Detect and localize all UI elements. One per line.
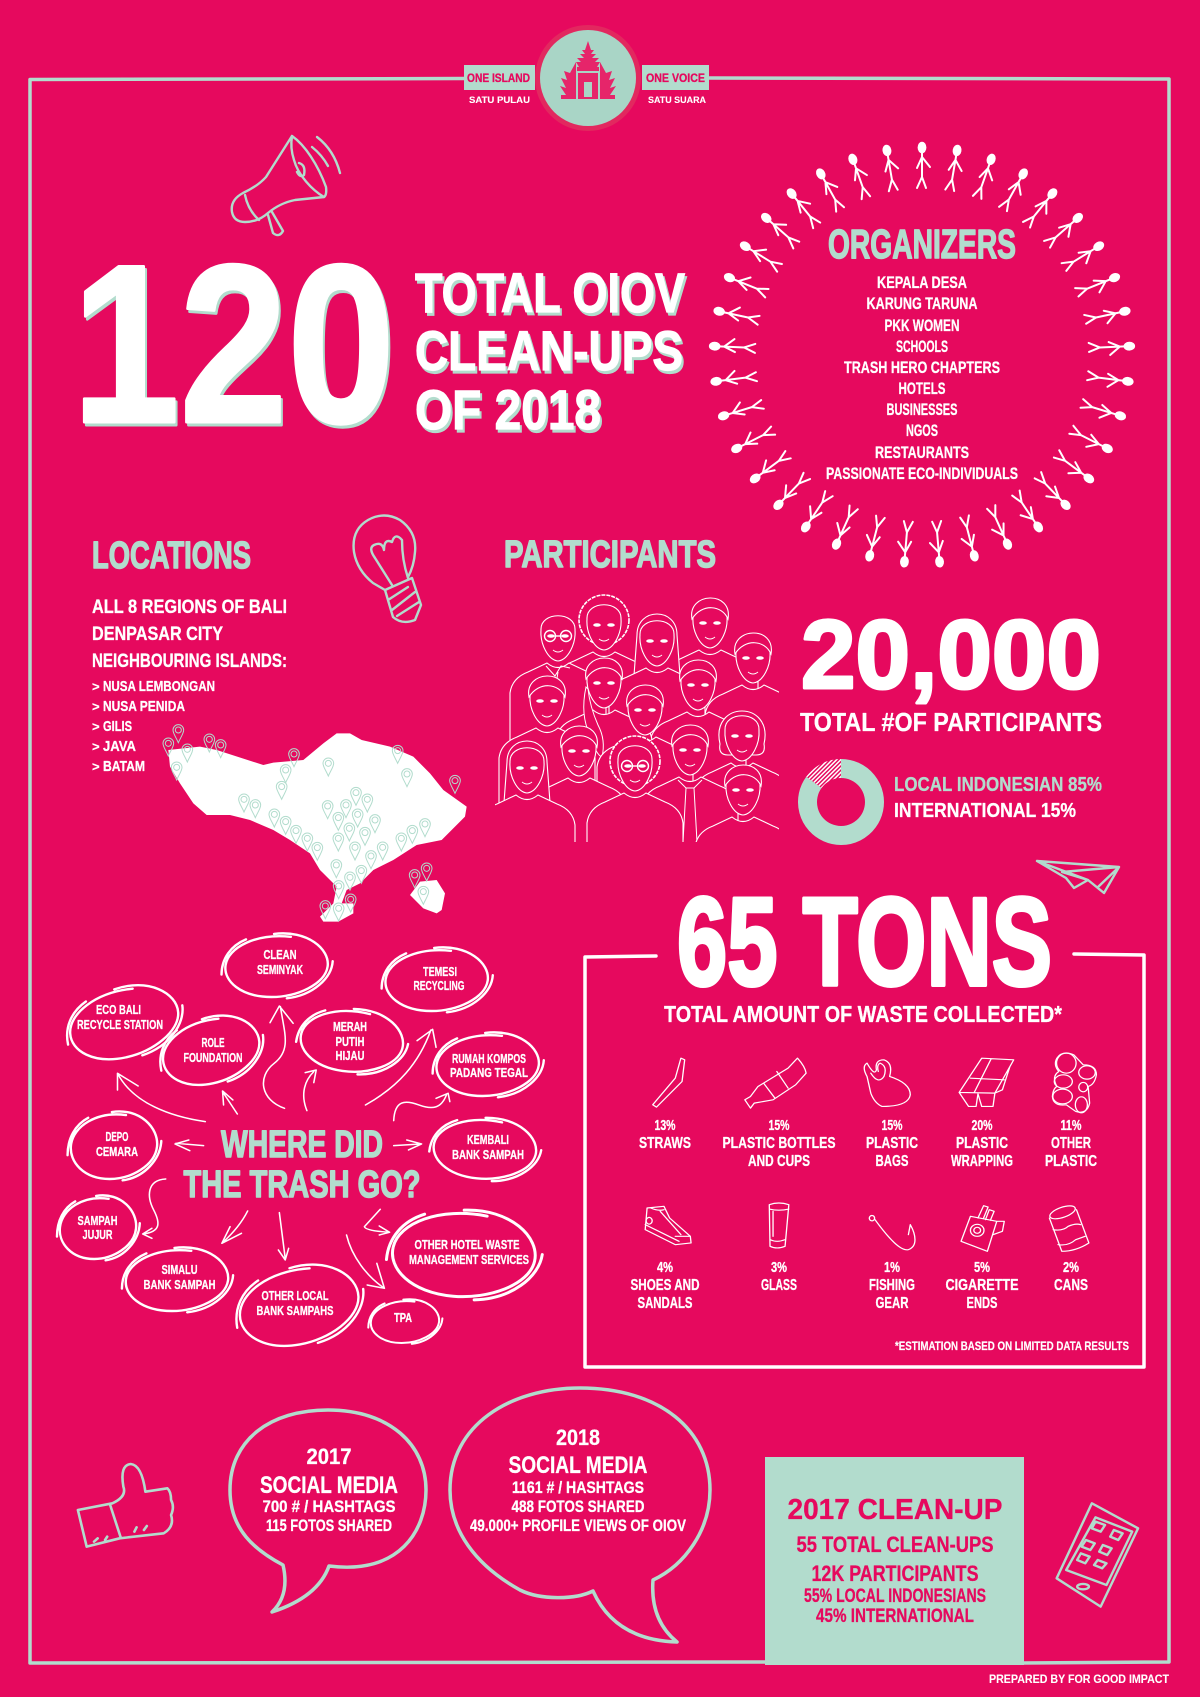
- item: fishing gear: 1%: [884, 1259, 900, 1276]
- panel: 2017 clean-up: 55% LOCAL INDONESIANS: [804, 1586, 986, 1607]
- donut legend: LOCAL INDONESIAN 85%: [894, 774, 1102, 796]
- destination: Simalu Bank Sampah: [122, 1247, 233, 1312]
- subheading: total amount of waste: TOTAL AMOUNT OF WASTE COLLECTED*: [664, 1001, 1062, 1027]
- destination: Temesi Recycling: TEMESI: [423, 964, 457, 979]
- panel: organizers ring: [709, 142, 1135, 568]
- item: plastic bottles and cups: 15%: [768, 1117, 790, 1134]
- destination: Merah Putih Hijau: PUTIH: [336, 1034, 364, 1049]
- destination: Other Local Bank Sampahs: [228, 1256, 371, 1356]
- locations list: [92, 597, 287, 775]
- icon: light bulb: [354, 516, 421, 622]
- destination: Eco Bali Recycle Station: RECYCLE STATION: [77, 1017, 163, 1032]
- speech bubble: 2018 social media: 488 FOTOS SHARED: [512, 1497, 644, 1516]
- item: straws: [639, 1058, 691, 1152]
- speech bubble: 2018 social media: 2018: [556, 1425, 600, 1450]
- headline: 120 total clean-ups: TOTAL OIOV: [417, 264, 687, 327]
- organizers list: RESTAURANTS: [875, 443, 969, 462]
- item: other plastic: PLASTIC: [1045, 1153, 1097, 1170]
- item: plastic wrapping: PLASTIC: [956, 1135, 1008, 1152]
- headline: 65 tons: 65 TONS: [677, 873, 1052, 1012]
- donut chart: local vs international: [807, 768, 874, 835]
- item: other plastic: OTHER: [1051, 1135, 1091, 1152]
- destination: Merah Putih Hijau: MERAH: [333, 1019, 367, 1034]
- heading: locations: LOCATIONS: [92, 535, 251, 577]
- heading: where did the trash go: WHERE DID: [221, 1124, 383, 1166]
- icon: megaphone: [232, 136, 340, 235]
- destination: Simalu Bank Sampah: SIMALU: [162, 1262, 198, 1277]
- item: cans: CANS: [1054, 1277, 1088, 1294]
- headline: 120 total clean-ups: [72, 217, 687, 473]
- destination: Clean Seminyak: [222, 933, 333, 998]
- item: plastic wrapping: WRAPPING: [951, 1153, 1013, 1170]
- headline: 120 total clean-ups: 120: [74, 220, 397, 473]
- item: fishing gear: [869, 1216, 915, 1312]
- destination: Rumah Kompos Padang Tegal: PADANG TEGAL: [450, 1065, 528, 1080]
- organizers list: BUSINESSES: [886, 400, 958, 419]
- item: plastic bags: [864, 1060, 918, 1170]
- organizers list: SCHOOLS: [896, 337, 948, 356]
- stat: 20,000 participants: TOTAL #OF PARTICIPANTS: [800, 707, 1102, 737]
- locations list: ALL 8 REGIONS OF BALI: [92, 597, 287, 618]
- destination: Eco Bali Recycle Station: ECO BALI: [96, 1002, 141, 1017]
- panel: 2017 clean-up: 45% INTERNATIONAL: [816, 1606, 974, 1627]
- destination: Other Hotel Waste Management Services: MANAGEMENT SERVICES: [409, 1252, 529, 1267]
- item: straws: 13%: [654, 1117, 676, 1134]
- icon: thumbs up: [78, 1464, 173, 1547]
- destination: Merah Putih Hijau: [293, 1001, 412, 1081]
- heading: where did the trash go: THE TRASH GO?: [184, 1164, 420, 1206]
- item: shoes and sandals: SANDALS: [638, 1295, 693, 1312]
- item: plastic wrapping: 20%: [972, 1117, 992, 1134]
- speech bubble: 2018 social media: 49.000+ PROFILE VIEWS OF OIOV: [470, 1516, 687, 1535]
- destination: Temesi Recycling: RECYCLING: [414, 978, 464, 993]
- headline: 120 total clean-ups: OF 2018: [417, 381, 603, 444]
- speech bubble: 2018 social media: SOCIAL MEDIA: [508, 1452, 648, 1479]
- locations list: >: [92, 719, 100, 734]
- item: shoes and sandals: SHOES AND: [630, 1277, 700, 1294]
- item: straws: STRAWS: [639, 1135, 691, 1152]
- locations list: NUSA LEMBONGAN: [103, 678, 215, 695]
- organizers list: KEPALA DESA: [877, 273, 967, 292]
- item: cigarette ends: [946, 1206, 1019, 1312]
- destination: Rumah Kompos Padang Tegal: RUMAH KOMPOS: [452, 1051, 526, 1066]
- item: plastic bottles and cups: PLASTIC BOTTLES: [722, 1135, 836, 1152]
- logo: One Island One Voice: [464, 25, 709, 131]
- panel: participants: [495, 540, 1102, 845]
- item: cigarette ends: 5%: [974, 1259, 990, 1276]
- destination: Depo Cemara: CEMARA: [96, 1144, 138, 1159]
- donut legend: [894, 774, 1102, 822]
- icon: temple gate: [560, 41, 616, 99]
- organizers list: KARUNG TARUNA: [866, 294, 978, 313]
- locations list: GILIS: [103, 718, 132, 735]
- destination: Other Local Bank Sampahs: OTHER LOCAL: [262, 1288, 329, 1303]
- panel: 65 tons of waste: [585, 873, 1144, 1367]
- heading: where did the trash go: [184, 1124, 420, 1206]
- destination: Other Hotel Waste Management Services: [384, 1203, 546, 1305]
- speech bubble: 2017 social media: 700 # / HASHTAGS: [262, 1497, 396, 1516]
- headline: 120 total clean-ups: CLEAN-UPS: [415, 319, 683, 382]
- panel: 2017 clean-up: [765, 1457, 1024, 1665]
- item: other plastic: 11%: [1060, 1117, 1082, 1134]
- speech bubble: 2017 social media: 2017: [306, 1444, 352, 1469]
- organizers list: TRASH HERO CHAPTERS: [844, 358, 1000, 377]
- destination: Simalu Bank Sampah: BANK SAMPAH: [144, 1277, 216, 1292]
- locations list: NUSA PENIDA: [103, 698, 185, 715]
- destination: Rumah Kompos Padang Tegal: [433, 1032, 544, 1097]
- item: plastic bags: BAGS: [876, 1153, 909, 1170]
- organizers list: HOTELS: [898, 379, 946, 398]
- item: cigarette ends: ENDS: [966, 1295, 998, 1312]
- logo: One Island One Voice: SATU PULAU: [469, 95, 530, 106]
- destination: Temesi Recycling: [382, 947, 493, 1012]
- item: plastic bags: PLASTIC: [866, 1135, 918, 1152]
- item: shoes and sandals: 4%: [657, 1259, 673, 1276]
- item: shoes and sandals: [630, 1206, 700, 1312]
- illustration: crowd of people: [495, 594, 779, 842]
- destination: Sampah Jujur: SAMPAH: [78, 1213, 118, 1228]
- speech bubble: 2017 social media: 115 FOTOS SHARED: [266, 1516, 392, 1535]
- panel: 2017 clean-up: 55 TOTAL CLEAN-UPS: [796, 1532, 994, 1557]
- item: fishing gear: GEAR: [876, 1295, 909, 1312]
- stat: 20,000 participants: 20,000: [801, 600, 1101, 709]
- item: glass: 3%: [771, 1259, 787, 1276]
- locations list: NEIGHBOURING ISLANDS:: [92, 651, 287, 672]
- arrows: [117, 1006, 450, 1288]
- map of Bali with pins: [163, 725, 467, 922]
- panel: 2017 clean-up: 12K PARTICIPANTS: [812, 1561, 978, 1586]
- heading: organizers: ORGANIZERS: [828, 221, 1016, 267]
- logo: One Island One Voice: SATU SUARA: [648, 95, 706, 106]
- footnote: *ESTIMATION BASED ON LIMITED DATA RESULTS: [895, 1339, 1129, 1353]
- item: other plastic: [1045, 1053, 1097, 1170]
- panel: 2017 clean-up: 2017 CLEAN-UP: [788, 1494, 1002, 1526]
- destination: Kembali Bank Sampah: BANK SAMPAH: [452, 1147, 524, 1162]
- locations list: >: [92, 679, 100, 694]
- locations list: >: [92, 739, 100, 754]
- locations list: BATAM: [103, 758, 145, 775]
- icon: smartphone: [1057, 1503, 1138, 1607]
- panel: where did the trash go: [57, 933, 546, 1356]
- item: plastic bottles and cups: [722, 1058, 836, 1170]
- panel: locations: [92, 516, 467, 922]
- item: plastic wrapping: [951, 1058, 1014, 1170]
- locations list: >: [92, 759, 100, 774]
- item: cans: [1048, 1203, 1089, 1294]
- credit line: PREPARED BY FOR GOOD IMPACT: [989, 1672, 1170, 1686]
- headline: 120 total clean-ups: TOTAL OIOV: [415, 261, 685, 324]
- destination: Kembali Bank Sampah: [427, 1112, 544, 1186]
- item: fishing gear: FISHING: [869, 1277, 915, 1294]
- logo: One Island One Voice: ONE VOICE: [646, 71, 705, 85]
- organizers list: PKK WOMEN: [884, 316, 960, 335]
- organizers list: [826, 273, 1018, 483]
- heading: participants: PARTICIPANTS: [504, 534, 716, 576]
- item: plastic bottles and cups: AND CUPS: [748, 1153, 810, 1170]
- destination: Merah Putih Hijau: HIJAU: [336, 1048, 364, 1063]
- organizers list: NGOS: [906, 421, 938, 440]
- headline: 120 total clean-ups: OF 2018: [415, 378, 601, 441]
- headline: 120 total clean-ups: 120: [72, 217, 395, 470]
- locations list: >: [92, 699, 100, 714]
- item: cans: 2%: [1063, 1259, 1079, 1276]
- destination: Clean Seminyak: CLEAN: [264, 947, 296, 962]
- box outline: [585, 954, 1144, 1367]
- speech bubble: 2018 social media: [450, 1388, 710, 1642]
- destination: Role Foundation: [152, 1007, 271, 1095]
- item: plastic bags: 15%: [882, 1117, 902, 1134]
- destination: Kembali Bank Sampah: KEMBALI: [467, 1132, 509, 1147]
- destination: Eco Bali Recycle Station: [59, 976, 191, 1070]
- locations list: DENPASAR CITY: [92, 624, 223, 645]
- destination: Role Foundation: ROLE: [202, 1035, 225, 1050]
- ring of stick figures: [709, 142, 1135, 568]
- headline: 120 total clean-ups: CLEAN-UPS: [417, 322, 685, 385]
- speech bubble: 2018 social media: 1161 # / HASHTAGS: [512, 1478, 644, 1497]
- destination: Clean Seminyak: SEMINYAK: [257, 962, 303, 977]
- donut legend: INTERNATIONAL 15%: [894, 800, 1076, 822]
- destination: Depo Cemara: DEPO: [106, 1129, 128, 1144]
- item: glass: [761, 1203, 797, 1294]
- destination: Other Hotel Waste Management Services: OTHER HOTEL WASTE: [414, 1237, 520, 1252]
- logo: One Island One Voice: ONE ISLAND: [467, 71, 530, 85]
- destination: TPA: [368, 1299, 442, 1344]
- locations list: JAVA: [103, 738, 136, 755]
- icon: paper plane: [1037, 861, 1119, 893]
- destination: TPA: TPA: [394, 1310, 412, 1325]
- organizers list: PASSIONATE ECO-INDIVIDUALS: [826, 464, 1018, 483]
- item: cigarette ends: CIGARETTE: [946, 1277, 1019, 1294]
- speech bubble: 2017 social media: SOCIAL MEDIA: [260, 1472, 398, 1499]
- item: glass: GLASS: [761, 1277, 797, 1294]
- destination: Depo Cemara: [68, 1111, 161, 1180]
- destination: Role Foundation: FOUNDATION: [184, 1050, 242, 1065]
- destination: Sampah Jujur: JUJUR: [82, 1227, 113, 1242]
- destination: Sampah Jujur: [57, 1195, 140, 1260]
- destination: Other Local Bank Sampahs: BANK SAMPAHS: [256, 1303, 334, 1318]
- speech bubble: 2017 social media: [230, 1410, 426, 1612]
